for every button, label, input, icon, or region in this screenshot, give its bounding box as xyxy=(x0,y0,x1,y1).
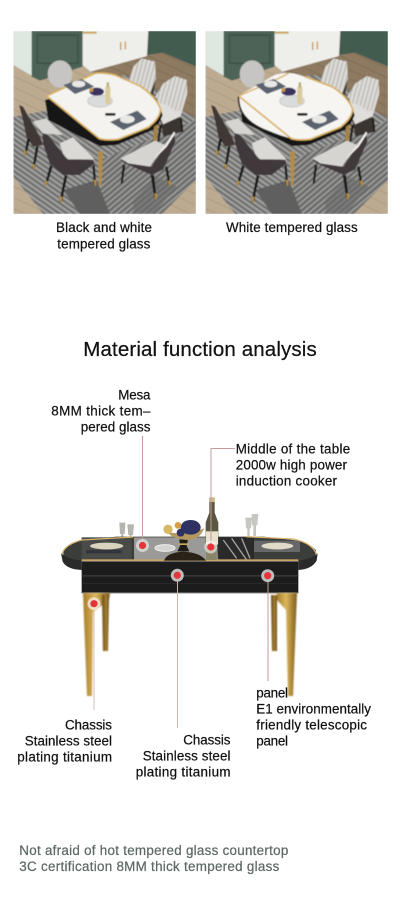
callout: induction cooker xyxy=(204,441,350,554)
footer note: 3C certification 8MM thick tempered glass xyxy=(19,859,280,874)
photo: white tempered glass table xyxy=(205,31,388,214)
marker: chassis left xyxy=(88,597,100,610)
label: mesa: 8MM thick tem– xyxy=(51,404,151,418)
label: chassis left: Chassis xyxy=(65,717,112,732)
label: panel: panel xyxy=(256,733,288,748)
label: panel: E1 environmentally xyxy=(256,701,371,716)
label: chassis left: plating titanium xyxy=(17,749,112,764)
callout: telescopic panel xyxy=(256,569,371,748)
footer note xyxy=(19,843,288,874)
label: panel: panel xyxy=(256,685,288,700)
wine bottle xyxy=(206,498,218,544)
label: mesa: pered glass xyxy=(81,420,151,434)
callout: mesa tabletop xyxy=(51,387,151,552)
label: panel xyxy=(256,685,371,748)
label: mesa: Mesa xyxy=(118,387,151,402)
fruit bowl centerpiece xyxy=(164,552,206,561)
marker: chassis center xyxy=(171,569,184,582)
label: induction cooker: 2000w high power xyxy=(236,457,348,472)
callout: chassis left leg xyxy=(17,597,112,764)
table legs xyxy=(83,593,297,696)
leader line: panel xyxy=(267,576,269,681)
leader line: mesa xyxy=(142,436,144,545)
label: chassis center: Chassis xyxy=(183,732,231,747)
marker: panel xyxy=(261,569,274,582)
glasses xyxy=(119,523,134,555)
label: induction cooker xyxy=(236,441,350,488)
label: chassis left xyxy=(17,717,112,764)
leader line: induction cooker xyxy=(211,448,235,547)
label: chassis center xyxy=(136,732,231,779)
leader line: chassis left xyxy=(93,604,95,710)
label: chassis left: Stainless steel xyxy=(25,733,112,748)
caption: black and white tempered glass xyxy=(56,220,152,251)
caption: white tempered glass: White tempered glass xyxy=(226,220,358,235)
caption: black and white tempered glass: Black and white xyxy=(56,220,152,235)
label: induction cooker: induction cooker xyxy=(236,473,338,488)
title: Material function analysis xyxy=(83,338,317,361)
table top glass xyxy=(63,537,316,561)
label: induction cooker: Middle of the table xyxy=(236,441,350,456)
black apron xyxy=(82,561,298,593)
marker: induction cooker xyxy=(204,540,217,554)
caption: black and white tempered glass: tempered glass xyxy=(57,236,151,251)
photo: black and white tempered glass table xyxy=(13,31,196,214)
label: chassis center: Stainless steel xyxy=(143,748,231,763)
label: chassis center: plating titanium xyxy=(136,764,230,779)
label: panel: friendly telescopic xyxy=(256,717,367,732)
leader line: chassis center xyxy=(176,576,178,728)
footer note: Not afraid of hot tempered glass countertop xyxy=(19,843,288,858)
label: mesa xyxy=(51,387,151,434)
table product image xyxy=(61,497,318,593)
rounded end caps xyxy=(61,553,82,570)
marker: mesa xyxy=(136,539,149,552)
callout: chassis center xyxy=(136,569,231,779)
